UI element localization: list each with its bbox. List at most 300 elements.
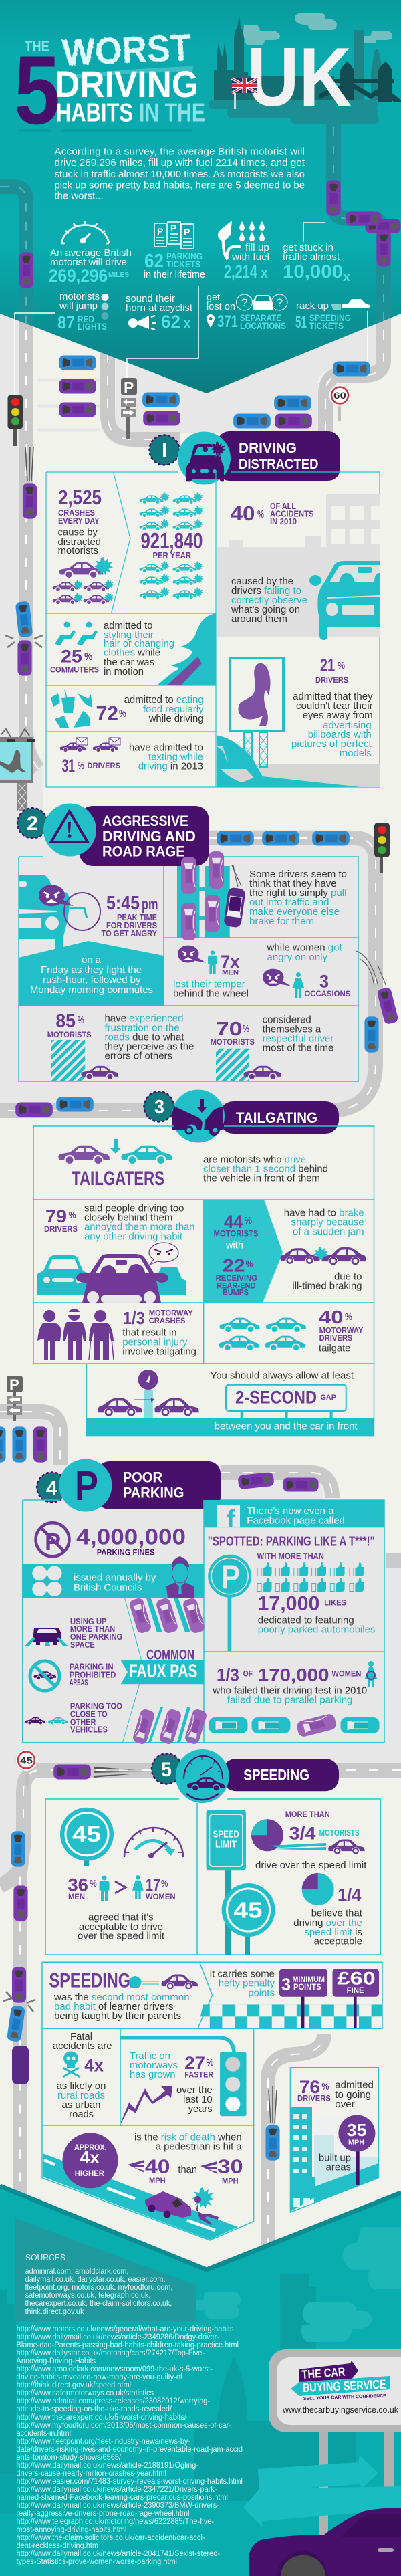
panel: 44 percent motorists: %	[246, 1259, 253, 1270]
intro paragraph: drive 269,296 miles, fill up with fuel 2214 times, and get	[55, 157, 305, 169]
common faux pas	[121, 1597, 208, 1745]
panel: 85 percent frustration: roads due to what	[104, 1031, 184, 1043]
panel: built-up areas: to going	[335, 2089, 371, 2101]
icon: exhaust cloud and car	[129, 1975, 198, 1988]
icon: purple crashing cars	[53, 557, 114, 604]
number badge 2: 2	[27, 813, 38, 835]
stat: parking tickets: 62	[144, 251, 164, 272]
panel: fatal accidents: as likely on	[57, 2080, 106, 2092]
panel: texting while driving: DRIVERS	[87, 761, 120, 770]
sources box: adminiral.com, arnoldclark.com,	[25, 2268, 128, 2276]
panel: 40 percent of accidents: ACCIDENTS	[270, 510, 314, 519]
panel: billboards: DRIVERS	[315, 675, 348, 685]
panel: 40 percent of accidents: drivers failing to	[231, 585, 301, 597]
stat: speeding tickets: rack up	[296, 300, 329, 312]
callout: 2-second sign: GAP	[321, 1394, 336, 1402]
panel: peak time: 5:45	[106, 893, 140, 914]
intro paragraph: According to a survey, the average British motorist will	[55, 146, 305, 158]
panel: 44 percent motorists: due to	[334, 1271, 362, 1282]
panel: 40 percent tailgate: tailgate	[319, 1343, 350, 1354]
icon: speed limit sign: SPEED	[213, 1828, 239, 1840]
faux pas list: SPACE	[70, 1640, 95, 1650]
number badge 3	[144, 1091, 174, 1122]
panel: 79 percent annoyed: any other driving habit	[84, 1231, 183, 1243]
stat: speeding tickets: TICKETS	[309, 321, 344, 331]
source url list: most-annoying-driving-habits.html	[16, 2526, 126, 2534]
icon: woman driver	[364, 1661, 377, 1687]
title: shadows	[19, 129, 192, 132]
logo: the car buying service: SELL YOUR CAR WITH CONFIDENCE	[303, 2394, 386, 2401]
panel: penalties: it carries some	[210, 1969, 275, 1980]
panel: motorway traffic growth: Traffic on	[130, 2050, 170, 2062]
panel: 40 percent of accidents: 40	[230, 502, 255, 525]
leader line to parking sign	[127, 286, 198, 378]
source url list: accidents-in.html	[16, 2430, 71, 2438]
panel: two-second gap: You should always allow at least	[211, 1370, 354, 1382]
sources box: SOURCES	[25, 2252, 65, 2262]
cars: lower left road	[3, 1831, 35, 2084]
title: HABITS	[56, 99, 133, 127]
faux pas list: CLOSE TO	[70, 1710, 108, 1719]
panel: parking fines	[36, 1523, 186, 1558]
sources box: think.direct.gov.uk	[25, 2308, 84, 2316]
faux pas list: VEHICLES	[70, 1725, 108, 1735]
icon: row of parked cars	[209, 1713, 380, 1738]
panel: eating while driving: admitted to eating	[124, 694, 204, 706]
source url list: http://www.admiral.com/press-releases/23082012/worrying-	[16, 2397, 210, 2405]
stat: miles driven: An average British	[50, 247, 132, 259]
checkered band	[198, 2004, 382, 2028]
stat: red lights: RED	[78, 314, 94, 324]
icon: teal crashing cars	[140, 492, 203, 599]
panel: motorway traffic growth: has grown	[130, 2069, 175, 2080]
sources box: fleetpoint.org, motors.co.uk, myfoodforu.com,	[25, 2284, 172, 2292]
section 1 heading: driving distracted: DISTRACTED	[239, 457, 318, 472]
source url list: attitude-to-speeding-on-the-uks-roads-revealed/	[16, 2405, 172, 2413]
icon: facebook tab	[217, 1505, 240, 1533]
number badge 1	[150, 435, 179, 465]
source url list: http://www.motors.co.uk/news/general/what-are-your-driving-habits	[16, 2325, 234, 2333]
panel: built-up areas: areas	[326, 2162, 351, 2173]
panel: motorway traffic growth: motorways	[130, 2060, 178, 2071]
source url list: Blame-dad-Parents-passing-bad-habits-children-taking-practice.html	[16, 2341, 239, 2349]
icon: four teal cars	[219, 1318, 306, 1350]
number badge 4: 4	[46, 1478, 57, 1499]
panel: parking fines: PARKING FINES	[97, 1548, 155, 1558]
icon: two cars with gap	[98, 1398, 199, 1415]
speed sign 60	[329, 385, 350, 421]
stat: speeding tickets: 51	[295, 313, 307, 332]
panel: eating while driving: %	[119, 708, 126, 720]
number badge 3: 3	[154, 1097, 164, 1118]
stat: parking tickets: PARKING	[166, 251, 203, 261]
sign: 3 minimum points	[279, 1969, 327, 2028]
panel: 79 percent annoyed: said people driving too	[84, 1203, 184, 1214]
panel: 85 percent frustration: %	[78, 1014, 84, 1026]
icon: teal band	[19, 941, 164, 1006]
icon: annoyed speech bubble	[149, 1243, 178, 1265]
sign: 60 pound fine: FINE	[347, 1985, 364, 1995]
panel: issued by councils: issued annually by	[74, 1572, 156, 1583]
panel: texting while driving: have admitted to	[129, 742, 203, 754]
panel: 79 percent annoyed: 79	[45, 1206, 67, 1226]
panel: three quarters and one quarter: 3/4	[289, 1824, 316, 1844]
section 5 heading: speeding	[152, 1749, 339, 1803]
icon: skull and crossbones	[63, 2052, 80, 2077]
sources box	[15, 2218, 196, 2321]
panel: speeding outlines	[45, 1799, 381, 1955]
stat: lost	[207, 292, 287, 331]
panel: eating while driving	[51, 690, 204, 728]
footer skyline and clouds	[0, 2274, 356, 2514]
parking sign	[121, 378, 137, 439]
panel: 40 percent of accidents: OF ALL	[270, 502, 296, 511]
panel: texting while driving: 31	[62, 756, 75, 776]
traffic light right	[374, 823, 390, 873]
UK lettering: UK	[247, 31, 352, 124]
panel: billboards: billboards with	[308, 729, 372, 740]
pie chart: three quarters	[251, 1819, 283, 1851]
panel: 40 percent of accidents: what's going on	[231, 604, 300, 615]
panel: speeding outline row	[42, 1962, 382, 2240]
parking sign on lower road: P	[9, 1376, 19, 1393]
panel: styling hair: clothes while	[104, 647, 160, 659]
panel: 85 percent frustration: errors of others	[104, 1050, 172, 1061]
panel: facebook page: Facebook page called	[247, 1515, 345, 1526]
stat: lost: LOCATIONS	[240, 321, 286, 331]
panel: pulling out into traffic: the right to simply pull	[249, 887, 346, 899]
cars: tailgating road	[15, 1097, 94, 1117]
panel: parallel parking test	[209, 1661, 380, 1738]
panel: motorway injuries	[37, 1308, 196, 1360]
sign: 3 minimum points: MINIMUM	[292, 1975, 325, 1984]
stat: miles driven	[49, 221, 132, 286]
stat: horn: 62	[161, 312, 180, 332]
panel: built-up areas	[290, 2068, 378, 2212]
stat: speeding tickets: SPEEDING	[309, 313, 351, 323]
stat: fuel: with fuel	[231, 251, 269, 263]
panel: 85 percent frustration: have experienced	[104, 1012, 183, 1024]
panel: facebook page: 17,000	[257, 1592, 319, 1614]
panel: two-second gap	[86, 1370, 374, 1436]
stat: 30 mph: 30	[217, 2156, 243, 2177]
sources box: thecarexpert.co.uk, the-claim-solicitors.co.uk,	[25, 2300, 172, 2308]
panel: issued by councils	[23, 1556, 204, 1598]
stat: traffic: get stuck in	[283, 242, 333, 253]
section 2 heading: aggressive driving: AGGRESSIVE	[102, 813, 188, 829]
panel: 85 percent frustration: MOTORISTS	[47, 1030, 92, 1039]
sign: 60 pound fine	[333, 1968, 379, 2028]
stat: crashes per day	[53, 486, 114, 604]
speed sign 45	[15, 1749, 37, 1786]
panel: motorway traffic growth: FASTER	[184, 2070, 213, 2080]
faux pas list: ONE PARKING	[70, 1632, 122, 1642]
icon: horn	[128, 316, 156, 330]
cars: parking bay	[0, 1426, 319, 1492]
panel: billboards: admitted that they	[293, 691, 373, 702]
panel: 44 percent motorists: MOTORISTS	[214, 1228, 258, 1238]
faux pas list: OTHER	[70, 1717, 96, 1727]
scene: traffic jam	[177, 851, 246, 940]
panel: fatal accidents: 4x	[84, 2055, 104, 2075]
panel: 40 percent tailgate: %	[345, 1311, 352, 1323]
car: middle road blue	[265, 2086, 280, 2161]
title: DRIVING	[55, 63, 198, 105]
callout: 2-second sign: 2-SECOND	[235, 1387, 317, 1407]
panel: motorway traffic growth: %	[206, 2057, 214, 2068]
teal header chevron	[0, 0, 401, 393]
stat: crashes per year: PER YEAR	[152, 550, 192, 560]
panel: tailgaters definition: the vehicle in front of them	[203, 1172, 320, 1184]
logo signboard: www.thecarbuyingservice.co.uk	[282, 2405, 398, 2415]
panel: peak time: on a	[82, 954, 102, 966]
stat: crashes per year	[140, 492, 203, 599]
panel: parallel parking test: OF	[243, 1669, 253, 1679]
panel: pulling out into traffic: Some drivers seem to	[249, 869, 347, 880]
panel: pedestrian risk: a pedestrian is hit a	[156, 2141, 242, 2153]
panel: billboards: advertising	[323, 720, 372, 731]
section 3 heading: tailgating	[144, 1090, 339, 1142]
stat: speeding tickets	[295, 299, 370, 361]
panel: tailgaters definition	[58, 1139, 328, 1190]
speed sign 45: 45	[20, 1755, 33, 1765]
panel: motorway traffic growth	[120, 2038, 246, 2123]
panel: texting while driving: driving in 2013	[138, 761, 203, 772]
icon: map pin	[207, 314, 215, 328]
panel: men and women anger: angry on only	[267, 952, 327, 963]
panel: pedestrian risk	[43, 2132, 243, 2240]
panel: 70 percent respectful: 70	[216, 1018, 243, 1040]
sign: 35 mph: MPH	[348, 2139, 364, 2147]
stat: red lights: 87	[57, 312, 75, 332]
panel: 40 percent of accidents: caused by the	[231, 576, 293, 587]
source url list: http://www.dailymail.co.uk/news/article-2349286/Dodgy-driver-	[16, 2333, 219, 2341]
source url list: http://www.fleetpoint.org/fleet-industry-news/news-by-	[16, 2438, 190, 2446]
panel: 44 percent motorists: with	[225, 1240, 243, 1251]
panel: distracted driving outlines	[46, 472, 380, 787]
icon: question marks and car	[237, 294, 287, 310]
London skyline	[209, 13, 401, 124]
panel: texting while driving: %	[78, 760, 84, 772]
panel: learner drivers: bad habit of learner drivers	[54, 2001, 174, 2012]
icon: cars nose to nose	[172, 1099, 223, 1136]
panel: 70 percent respectful: most of the time	[263, 1042, 333, 1053]
panel: road rage outlines	[19, 857, 358, 1081]
panel: 40 percent of accidents: correctly observe	[231, 595, 307, 606]
section 2 heading: aggressive driving: DRIVING AND	[102, 828, 196, 845]
panel: three quarters and one quarter: believe that	[311, 1908, 363, 1919]
icon: crashing car	[186, 441, 226, 481]
icon: no cars	[30, 1661, 59, 1691]
panel: 85 percent frustration: 85	[55, 1011, 76, 1031]
source url list: http://www.telegraph.co.uk/motoring/news/6222885/The-five-	[16, 2518, 214, 2526]
icon: car front	[309, 561, 380, 640]
panel: 44 percent motorists: ill-timed braking	[292, 1280, 362, 1291]
panel: 44 percent motorists: BUMPS	[223, 1288, 249, 1297]
panel: 70 percent respectful: considered	[263, 1014, 311, 1025]
panel: 40 percent tailgate: DRIVERS	[319, 1333, 352, 1343]
icon: clock	[64, 893, 100, 930]
panel: three quarters and one quarter: speed limit is	[304, 1927, 362, 1938]
panel: fatal accidents: rural roads	[57, 2090, 105, 2101]
panel: 70 percent respectful	[211, 1014, 333, 1081]
panel: penalties: hefty penalty	[219, 1978, 275, 1990]
intro paragraph: stuck in traffic almost 10,000 times. As motorists we also	[55, 169, 305, 180]
panel: built-up areas: built up	[319, 2153, 351, 2164]
header roads on teal	[0, 120, 384, 334]
number badge 5: 5	[161, 1759, 172, 1781]
panel: motorway traffic growth: 27	[184, 2053, 205, 2073]
stat: traffic: traffic almost	[283, 251, 340, 263]
source url list: http://www.dailystar.co.uk/motoring/cars/274217/Top-Five-	[16, 2349, 205, 2357]
source url list: http://think.direct.gov.uk/speed.html	[16, 2381, 131, 2389]
stat: parking tickets	[144, 222, 205, 280]
panel: styling hair: 25	[61, 647, 82, 667]
panel: 40 percent tailgate	[219, 1307, 363, 1354]
callout: 2-second sign	[226, 1385, 346, 1418]
parking sign: P	[124, 379, 134, 396]
callout: 4x higher	[63, 2133, 118, 2188]
stat: parking tickets: P	[170, 223, 176, 233]
intro paragraph: pick up some pretty bad habits, here are 5 deemed to be	[55, 180, 305, 191]
stat: lost: lost on	[207, 301, 235, 312]
panel: styling hair: styling their	[104, 629, 154, 641]
source url list: really-aggressive-drivers-prone-road-rage-wheel.html	[16, 2510, 190, 2518]
title: WORST	[61, 26, 192, 74]
panel: pedestrian risk: is the risk of death when	[134, 2132, 242, 2143]
stat: 40 mph	[128, 2156, 170, 2185]
stat: red lights: LIGHTS	[78, 322, 107, 332]
source url list: http://www.thecarexpert.co.uk/5-worst-driving-habits/	[16, 2413, 187, 2422]
faux pas list: MORE THAN	[70, 1624, 115, 1634]
panel: 85 percent frustration: they perceive as the	[104, 1041, 194, 1052]
icon: tickets	[154, 222, 194, 249]
stat: miles driven: 269,296	[49, 265, 108, 286]
icon: question marks and car: ?	[241, 296, 247, 309]
stat: fuel: 2,214	[224, 261, 257, 282]
faux pas list: AREAS	[70, 1678, 88, 1687]
panel: 70 percent respectful: themselves a	[263, 1023, 321, 1035]
panel: tailgaters definition: closer than 1 second behind	[203, 1163, 328, 1174]
panel: 79 percent annoyed: annoyed them more than	[84, 1222, 195, 1233]
panel: fatal accidents: accidents are	[53, 2040, 112, 2052]
stat: crashes per day: CRASHES	[58, 508, 95, 518]
panel: facebook page: poorly parked automobiles	[258, 1624, 375, 1636]
icon: cars with envelopes	[60, 738, 120, 752]
panel: motorway traffic growth: over the	[176, 2084, 213, 2096]
stat: red lights: will jump	[59, 300, 98, 312]
panel: peak time: PEAK TIME	[117, 913, 157, 922]
cars: left road crash	[5, 447, 43, 676]
icon: parked cars bottom	[132, 1707, 208, 1745]
icon: large P: P	[75, 1463, 98, 1509]
stat: horn: x	[184, 316, 190, 331]
panel: peak time: Friday as they fight the	[41, 964, 142, 976]
teal footer	[0, 2185, 401, 2576]
section 4 heading: poor parking: PARKING	[123, 1484, 184, 1501]
panel: 70 percent respectful: MOTORISTS	[211, 1037, 255, 1047]
icon: speed sign 45 lower	[222, 1883, 275, 1937]
scene: road and windscreen	[216, 735, 380, 787]
stat: miles driven: motorist will drive	[50, 257, 127, 268]
panel: peak time: Monday morning commutes	[30, 984, 153, 996]
panel: men and women on speeding	[60, 1808, 183, 1942]
panel: 70 percent respectful: respectful driver	[263, 1033, 333, 1044]
panel: 44 percent motorists	[203, 1200, 366, 1303]
panel: three quarters and one quarter: MORE THAN	[285, 1810, 330, 1819]
sign: 3 minimum points: 3	[281, 1975, 291, 1994]
faux pas list: PROHIBITED	[70, 1671, 116, 1680]
stat: crashes per day: motorists	[57, 545, 98, 556]
panel: 40 percent of accidents	[217, 494, 380, 640]
sign posts	[319, 2432, 394, 2541]
callout: 4x higher: APPROX.	[74, 2143, 107, 2152]
panel: motorway injuries: that result in	[122, 1327, 176, 1339]
stat: fuel	[218, 221, 269, 282]
stat: lost: SEPARATE	[240, 313, 281, 323]
stat: horn: sound their	[126, 293, 175, 304]
grey ground zones	[0, 314, 401, 1886]
source url list: http://www.easier.com/71483-survey-reveals-worst-driving-habits.html	[16, 2478, 243, 2486]
faux pas list	[25, 1617, 122, 1735]
icon: fuel nozzle and drops	[218, 221, 265, 259]
sign: 60 pound fine: £60	[337, 1968, 376, 1988]
panel: 44 percent motorists: REAR-END	[217, 1281, 256, 1291]
pie chart: one quarter	[302, 1873, 334, 1905]
panel: styling hair	[50, 613, 216, 685]
faux pas list: PARKING TOO	[70, 1702, 122, 1711]
panel: men and women anger: OCCASIONS	[304, 989, 350, 998]
number badge 5	[152, 1753, 182, 1784]
icon: rear-end crash	[281, 1247, 366, 1264]
source url list: http://www.myfoodforu.com/2013/05/most-common-causes-of-car-	[16, 2422, 231, 2430]
stat: crashes per day: distracted	[57, 536, 101, 548]
panel: 40 percent of accidents: %	[257, 509, 264, 520]
icon: parked cars top	[123, 1597, 206, 1742]
panel: billboards: models	[340, 748, 372, 759]
title: IN THE	[139, 99, 205, 127]
speed sign 60: 60	[333, 390, 346, 401]
panel: peak time: rush-hour, followed by	[43, 974, 141, 986]
stat: red lights	[15, 291, 108, 395]
panel: fatal accidents: roads	[69, 2109, 94, 2120]
stat: 30 mph	[200, 2156, 243, 2186]
section 2 heading: aggressive driving	[17, 804, 209, 866]
icon: speed limit sign	[206, 1810, 250, 1955]
panel: three quarters and one quarter: 1/4	[338, 1885, 361, 1905]
panel: 40 percent tailgate: MOTORWAY	[319, 1325, 363, 1335]
panel: billboards: pictures of perfect	[291, 738, 372, 750]
source url list: http://www.safermotorways.co.uk/statistics	[16, 2389, 154, 2397]
panel: three quarters and one quarter: acceptable	[314, 1936, 362, 1947]
panel: peak time: FOR DRIVERS	[106, 921, 157, 930]
roadside billboard	[0, 729, 35, 811]
panel: learner drivers: being taught by their parents	[54, 2010, 181, 2022]
panel: tailgaters definition: are motorists who drive	[203, 1154, 306, 1165]
logo: the car buying service: THE CAR	[301, 2365, 346, 2381]
stat: parking tickets: TICKETS	[166, 259, 200, 270]
panel: 44 percent motorists: have had to brake	[284, 1207, 364, 1218]
icon: billboard with model	[230, 658, 283, 767]
panel: billboards: %	[338, 660, 345, 671]
section 4 heading: poor parking	[37, 1459, 221, 1511]
stat: lost: get	[207, 292, 221, 303]
parking sign on lower road	[7, 1376, 23, 1421]
panel: parking outlines	[23, 1500, 384, 1743]
panel: penalties: points	[248, 1988, 275, 1999]
panel: men and women on speeding: %	[161, 1878, 168, 1889]
panel: 44 percent motorists: sharply because	[291, 1216, 364, 1228]
